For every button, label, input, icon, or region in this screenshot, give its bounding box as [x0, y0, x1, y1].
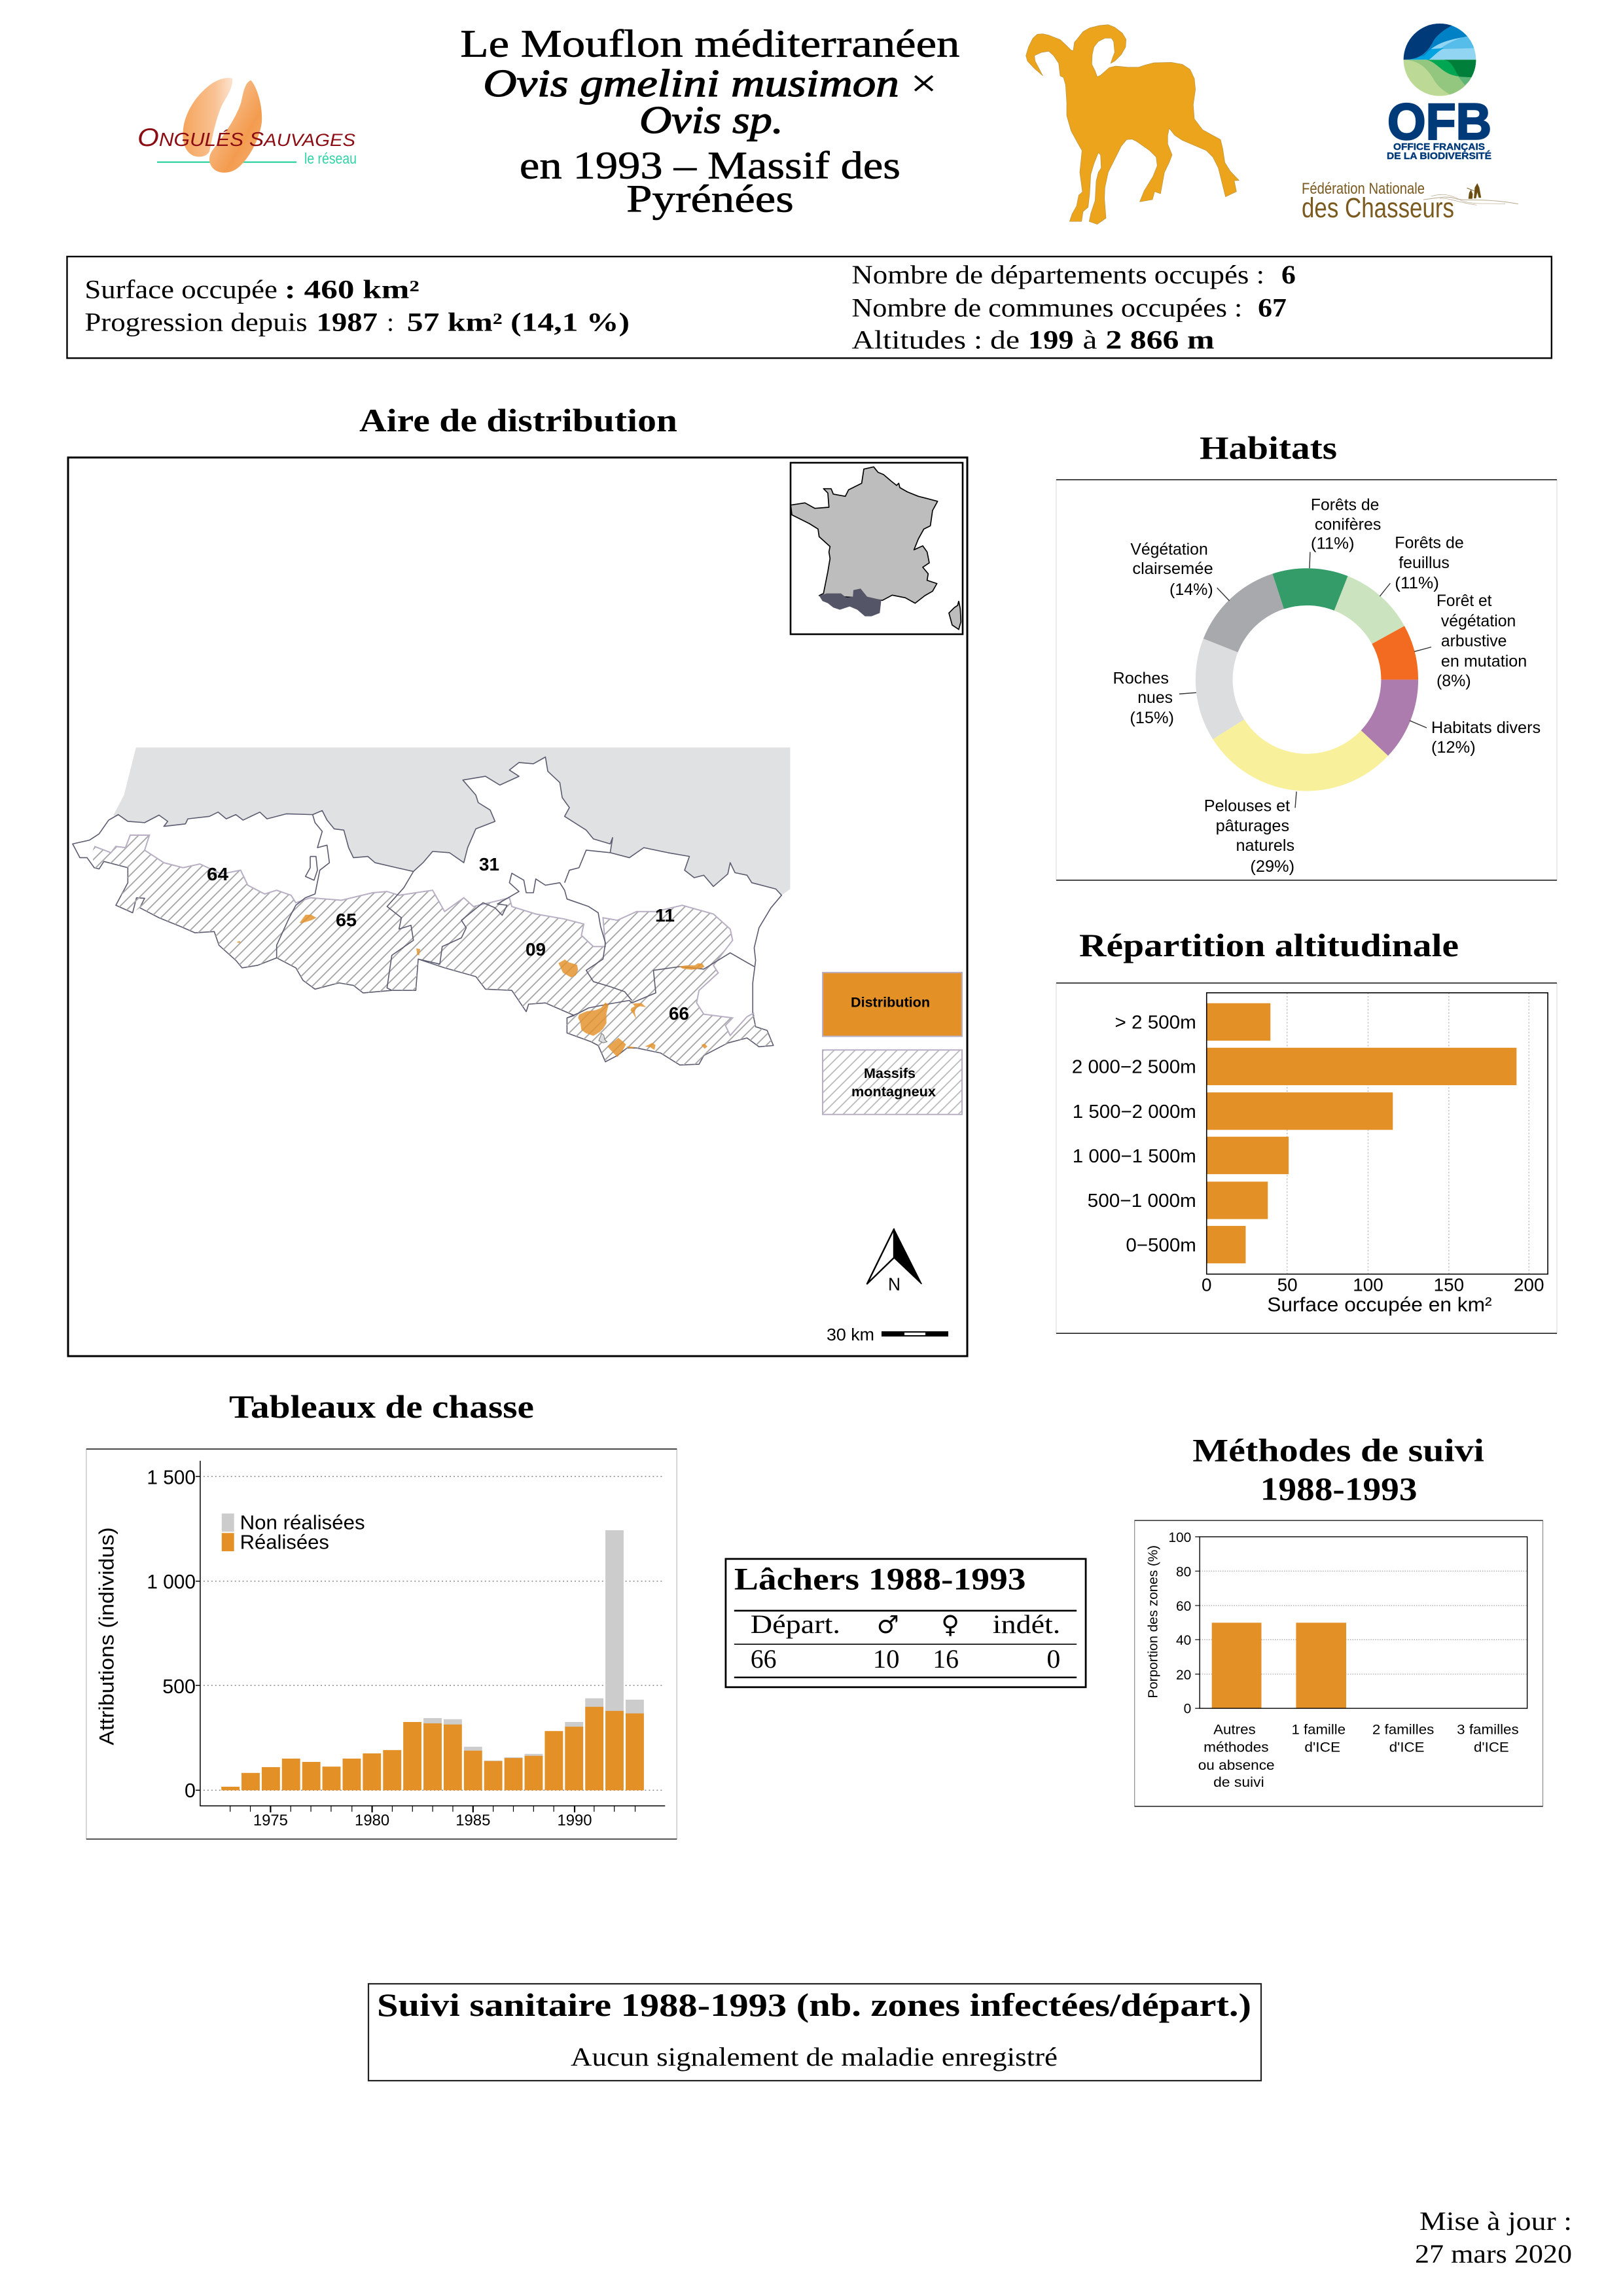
table row: 10: [873, 1645, 900, 1674]
map: department boundaries: [277, 815, 754, 1018]
heading: Tableaux de chasse: Tableaux de chasse: [229, 1388, 534, 1425]
map: neighbouring territory: [113, 747, 790, 920]
map: department labels: 11: [655, 905, 675, 925]
logo: OFB: [1387, 20, 1491, 162]
x axis labels: 1980: [355, 1812, 389, 1829]
altitude labels: 500−1 000m: [1088, 1191, 1196, 1211]
legend: Réalisées: [240, 1531, 329, 1554]
x axis labels: 1985: [455, 1812, 490, 1829]
panel: key figures: 57 km² (14,1 %): [407, 308, 630, 336]
icon: north arrow: [867, 1229, 921, 1294]
category labels: d'ICE: [1389, 1740, 1424, 1755]
table row: 66: [751, 1645, 777, 1674]
panel: Suivi sanitaire: [368, 1984, 1261, 2081]
category labels: méthodes: [1204, 1740, 1269, 1755]
scale bar: 30 km: [827, 1326, 874, 1344]
bars: not realised: [423, 1530, 644, 1762]
altitude labels: [1072, 1013, 1196, 1256]
map: department labels: [207, 854, 689, 1024]
y axis labels: 0: [1184, 1702, 1191, 1717]
category labels: [1198, 1722, 1519, 1790]
donut labels: (14%): [1169, 581, 1213, 599]
panel: distribution map: [68, 457, 967, 1356]
panel: hunting bags chart: [86, 1449, 677, 1839]
category labels: d'ICE: [1474, 1740, 1509, 1755]
donut labels: Forêts de: [1395, 533, 1464, 552]
icon: north arrow: N: [888, 1274, 901, 1294]
donut: Végétation clairsemée: [1204, 574, 1284, 653]
y axis labels: 100: [1168, 1530, 1191, 1545]
x axis labels: 1975: [253, 1812, 288, 1829]
table header: ♂: [877, 1610, 899, 1639]
altitude labels: 1 000−1 500m: [1073, 1146, 1196, 1167]
panel: key figures: à: [1083, 325, 1097, 354]
map: department labels: 64: [207, 864, 228, 884]
legend: Massifs montagneux: montagneux: [851, 1085, 936, 1100]
update date: 27 mars 2020: [1415, 2239, 1572, 2269]
donut labels: en mutation: [1441, 652, 1527, 670]
altitude labels: 0−500m: [1126, 1235, 1196, 1256]
x axis labels: 1990: [557, 1812, 592, 1829]
table row: [751, 1645, 1060, 1674]
update date: [1415, 2206, 1572, 2269]
x axis: 50: [1277, 1275, 1298, 1295]
donut labels: (12%): [1431, 738, 1476, 757]
x axis labels: [253, 1812, 592, 1829]
table: Lâchers 1988-1993: [726, 1559, 1086, 1687]
panel: key figures: Progression depuis: [84, 308, 308, 336]
donut: Forêts de conifères: [1272, 568, 1348, 611]
panel: habitats donut chart: [1056, 480, 1557, 880]
altitude labels: > 2 500m: [1115, 1013, 1196, 1033]
x axis title: Surface occupée en km²: [1267, 1293, 1492, 1316]
map: massif upper boundary: [94, 835, 754, 1035]
logo: Ongulés sauvages: [137, 78, 357, 173]
y axis labels: 1 500: [147, 1466, 196, 1489]
donut labels: [1113, 496, 1541, 876]
logo: Ongulés sauvages: le réseau: [304, 150, 357, 167]
donut labels: pâturages: [1216, 817, 1289, 835]
heading: Répartition altitudinale: Répartition altitudinale: [1079, 927, 1459, 963]
donut labels: (11%): [1311, 534, 1355, 552]
title: Ovis sp.: [639, 98, 783, 141]
y axis labels: [1168, 1530, 1191, 1717]
category labels: 1 famille: [1291, 1722, 1346, 1737]
panel: key figures: 2 866 m: [1105, 325, 1214, 354]
table header: ♀: [941, 1610, 959, 1639]
heading: Habitats: Habitats: [1200, 429, 1337, 466]
category labels: 2 familles: [1372, 1722, 1434, 1737]
donut labels: naturels: [1236, 836, 1294, 855]
scale bar: [827, 1326, 948, 1344]
donut: Habitats divers: [1361, 679, 1418, 756]
map furniture: legend, arrow and scale: [823, 973, 962, 1344]
logo: Ongulés sauvages: ONGULÉS SAUVAGES: [137, 124, 355, 152]
panel: key figures: Surface occupée: [84, 276, 277, 304]
donut labels: Forêts de: [1311, 496, 1379, 514]
legend: Massifs montagneux: Massifs: [864, 1066, 916, 1081]
map: hatched mountain massifs: [93, 836, 772, 1066]
legend: Massifs montagneux: [823, 1050, 962, 1115]
panel: monitoring methods chart: [1135, 1520, 1543, 1806]
panel: Suivi sanitaire: Suivi sanitaire 1988-1993 (nb. zones infectées/départ.): [377, 1986, 1251, 2023]
category labels: Autres: [1213, 1722, 1256, 1737]
altitude labels: 2 000−2 500m: [1072, 1057, 1196, 1078]
table row: 0: [1046, 1645, 1060, 1674]
donut labels: (29%): [1250, 857, 1294, 876]
table header: indét.: [993, 1610, 1060, 1639]
x axis: 100: [1353, 1275, 1383, 1295]
y axis labels: 500: [162, 1675, 196, 1698]
y axis title: Attributions (individus): [95, 1527, 118, 1746]
x axis: 0: [1202, 1275, 1212, 1295]
donut labels: arbustive: [1441, 632, 1507, 651]
panel: altitude bar chart: [1056, 983, 1557, 1333]
heading: Aire de distribution: Aire de distribution: [359, 402, 677, 439]
donut labels: Pelouses et: [1204, 797, 1290, 815]
logo: OFB: OFFICE FRANÇAIS: [1393, 141, 1485, 152]
donut labels: Végétation: [1130, 540, 1208, 558]
map: department labels: 31: [479, 854, 499, 874]
title: Le Mouflon méditerranéen: [460, 22, 959, 65]
leader lines: [1179, 552, 1431, 808]
bars: [1212, 1623, 1346, 1708]
panel: key figures: Nombre de communes occupées :: [851, 294, 1242, 323]
logo: Fédération Nationale des Chasseurs: [1302, 180, 1518, 224]
donut labels: feuillus: [1399, 554, 1450, 572]
panel: key figures: : 460 km²: [285, 276, 419, 304]
y axis labels: [147, 1466, 196, 1802]
table: Lâchers 1988-1993: Lâchers 1988-1993: [734, 1562, 1026, 1597]
y axis labels: 40: [1176, 1633, 1191, 1648]
logo: Fédération Nationale des Chasseurs: des Chasseurs: [1302, 192, 1454, 224]
logo: Fédération Nationale des Chasseurs: Fédération Nationale: [1302, 180, 1425, 198]
donut labels: (11%): [1395, 574, 1439, 592]
x axis: 200: [1514, 1275, 1544, 1295]
donut labels: (8%): [1436, 672, 1471, 690]
map: distribution patches: [238, 915, 707, 1057]
icon: mouflon silhouette: [1026, 25, 1239, 224]
map inset: France: [791, 463, 963, 634]
legend: Non réalisées: [240, 1511, 365, 1534]
donut labels: Habitats divers: [1431, 719, 1541, 737]
map: department labels: 65: [336, 910, 357, 930]
y axis labels: 20: [1176, 1668, 1191, 1683]
bars: realised: [221, 1707, 644, 1790]
x axis: 150: [1434, 1275, 1464, 1295]
panel: key figures: :: [387, 308, 394, 336]
legend: Distribution: [823, 973, 962, 1036]
update date: Mise à jour :: [1419, 2206, 1572, 2236]
category labels: d'ICE: [1304, 1740, 1340, 1755]
bars: [1207, 1003, 1516, 1263]
table header: [751, 1610, 1060, 1639]
y axis labels: 60: [1176, 1599, 1191, 1614]
donut labels: Forêt et: [1436, 592, 1492, 610]
map: department labels: 66: [669, 1003, 689, 1024]
heading: Méthodes de suivi 1988-1993: 1988-1993: [1260, 1471, 1417, 1507]
table header: Départ.: [751, 1610, 840, 1639]
donut: Forêt et végétation arbustive en mutation: [1372, 626, 1418, 679]
donut: Pelouses et pâturages naturels: [1213, 719, 1388, 791]
donut: Forêts de feuillus: [1334, 576, 1404, 644]
title: Ovis gmelini musimon ×: [483, 62, 937, 105]
legend: [222, 1511, 365, 1554]
panel: key figures: 67: [1258, 294, 1287, 323]
donut labels: végétation: [1441, 612, 1516, 630]
heading: Méthodes de suivi 1988-1993: Méthodes de suivi: [1192, 1433, 1484, 1469]
map: department labels: 09: [526, 939, 546, 960]
x axis: [1202, 1275, 1544, 1295]
panel: key figures: 6: [1281, 260, 1296, 289]
panel: key figures: 199: [1028, 325, 1074, 354]
logo: OFB: OFB: [1387, 93, 1491, 151]
panel: key figures: Altitudes : de: [851, 325, 1020, 354]
panel: key figures: 1987: [317, 308, 378, 336]
table row: 16: [933, 1645, 959, 1674]
legend: Distribution: Distribution: [851, 996, 930, 1011]
heading: Méthodes de suivi 1988-1993: [1192, 1433, 1484, 1507]
map: small lake: [599, 1033, 607, 1043]
y axis title: Porportion des zones (%): [1147, 1545, 1161, 1698]
logo: OFB: DE LA BIODIVERSITÉ: [1387, 151, 1491, 162]
category labels: de suivi: [1213, 1775, 1264, 1790]
donut labels: (15%): [1130, 709, 1174, 727]
y axis labels: 1 000: [147, 1570, 196, 1593]
category labels: 3 familles: [1457, 1722, 1519, 1737]
donut labels: Roches: [1113, 669, 1169, 687]
category labels: ou absence: [1198, 1758, 1275, 1773]
y axis labels: 0: [185, 1779, 196, 1802]
title: Pyrénées: [626, 177, 794, 220]
y axis labels: 80: [1176, 1565, 1191, 1580]
panel: key figures: Nombre de départements occupés :: [851, 260, 1264, 289]
donut: Roches nues: [1196, 639, 1244, 740]
donut labels: clairsemée: [1132, 560, 1213, 578]
altitude labels: 1 500−2 000m: [1073, 1102, 1196, 1122]
title: [460, 22, 959, 220]
donut labels: nues: [1137, 689, 1173, 707]
title: en 1993 – Massif des: [520, 144, 901, 187]
panel: key figures: [67, 257, 1552, 358]
panel: Suivi sanitaire: Aucun signalement de maladie enregistré: [571, 2042, 1058, 2072]
donut labels: conifères: [1315, 516, 1381, 534]
map: departments: [73, 757, 781, 1065]
